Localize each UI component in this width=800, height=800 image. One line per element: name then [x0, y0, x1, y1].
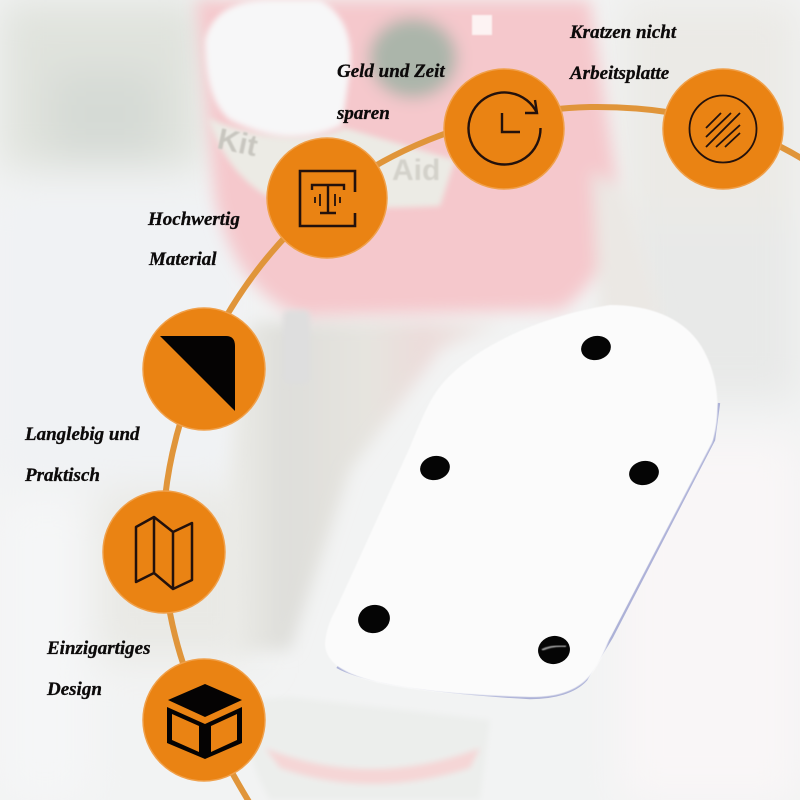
orange disc	[444, 69, 564, 189]
label: Kratzen nicht Arbeitsplatte: Kratzen nicht	[570, 22, 676, 43]
feature: scratch protection	[663, 69, 783, 189]
product: transparent mat with five feet	[325, 305, 719, 698]
feature: durable, triangle	[143, 308, 265, 430]
orange disc	[103, 491, 225, 613]
label: Geld und Zeit sparen: Geld und Zeit	[337, 61, 445, 82]
rubber foot: right	[627, 458, 661, 488]
label: Langlebig und Praktisch: Langlebig und	[25, 424, 140, 445]
feature: high quality material	[267, 138, 387, 258]
feature: time and money	[444, 69, 564, 189]
icon: corner triangle	[160, 336, 235, 411]
mat edge highlight	[337, 403, 719, 698]
feature: unique design, box	[143, 659, 265, 781]
rubber foot: top	[579, 333, 613, 363]
label: Einzigartiges Design: Einzigartiges	[47, 638, 150, 659]
blurred photo background: stand mixer: Aid	[392, 154, 440, 187]
label: Langlebig und Praktisch: Praktisch	[24, 465, 100, 486]
rubber foot: lower right	[536, 633, 572, 667]
label: Kratzen nicht Arbeitsplatte: Arbeitsplatte	[569, 63, 670, 84]
feature: practical, folded map	[103, 491, 225, 613]
icon: clock with arrow	[469, 92, 541, 164]
label: Geld und Zeit sparen: sparen	[336, 103, 390, 124]
icon: framed letter T	[300, 171, 355, 226]
label: Hochwertig Material: Material	[148, 249, 217, 270]
rubber foot: left	[418, 453, 452, 483]
orange disc	[267, 138, 387, 258]
orange disc	[143, 308, 265, 430]
label: Einzigartiges Design: Design	[46, 679, 102, 700]
orange disc	[143, 659, 265, 781]
label: Hochwertig Material: Hochwertig	[148, 209, 240, 230]
icon: hatched circle	[690, 96, 756, 162]
orange disc	[663, 69, 783, 189]
orange connector curve	[163, 107, 800, 800]
blurred photo background: stand mixer: Kit	[215, 123, 261, 163]
mat body	[325, 305, 717, 697]
rubber foot: lower left	[355, 602, 393, 636]
icon: folded map	[136, 517, 192, 589]
icon: box	[167, 684, 242, 759]
